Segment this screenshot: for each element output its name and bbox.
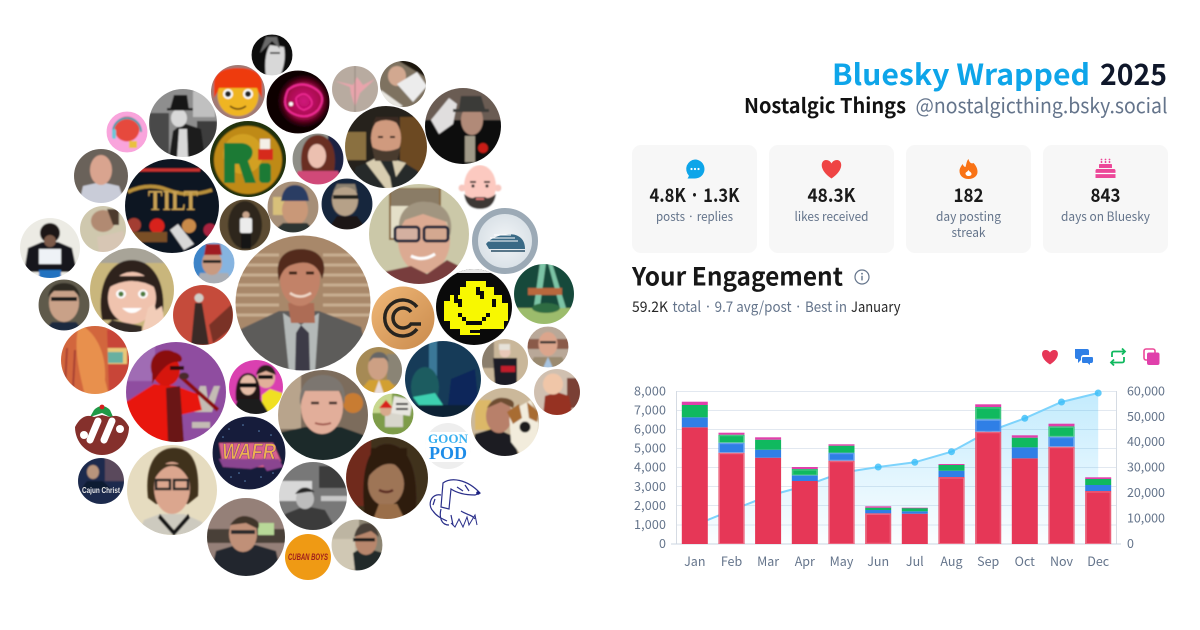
left axis labels: 3,000 [634, 476, 666, 495]
month labels [684, 551, 1110, 570]
avatar: man in woolly hat [267, 181, 319, 233]
card: likes received [769, 145, 894, 253]
avatar: top hat parade [148, 88, 218, 158]
avatar: red singer [125, 341, 227, 443]
icon: reposts [1111, 348, 1125, 366]
avatar: Cuban Boys orange [284, 533, 332, 581]
avatar: old man in glasses [321, 178, 373, 230]
avatar: teal aquarium scene [404, 340, 482, 418]
avatar: big man in grey suit [234, 234, 372, 372]
avatar: scary man in hat [424, 87, 502, 165]
avatar: woman with red hair [292, 133, 344, 185]
card: posts and replies [632, 145, 757, 253]
bars [682, 402, 1111, 544]
right axis labels: 40,000 [1127, 431, 1165, 450]
avatar: smiling man in blazer [527, 326, 569, 368]
card: posts and replies: posts · replies [656, 206, 733, 225]
avatar: woman with dark hair [345, 436, 429, 520]
right axis labels [1127, 380, 1165, 552]
avatar: bearded man [344, 105, 428, 189]
cumulative area [695, 393, 1098, 544]
icon: cake [1096, 159, 1116, 178]
card: likes received: 48.3K [808, 181, 856, 208]
title: 2025 [1100, 52, 1167, 94]
left axis labels: 4,000 [634, 456, 666, 476]
avatar: lego head [210, 64, 266, 120]
avatar: memoji [89, 247, 175, 333]
avatar: green fairground [513, 263, 575, 325]
avatar: red figure poster [172, 284, 234, 346]
right axis labels: 10,000 [1127, 508, 1165, 526]
cumulative line [691, 390, 1102, 529]
icon: quotes [1144, 349, 1160, 365]
month labels: Feb [721, 551, 742, 570]
month labels: Dec [1087, 551, 1110, 570]
avatar cluster [19, 34, 581, 581]
right axis labels: 20,000 [1127, 482, 1165, 501]
avatar: man with shaggy hair and glasses [125, 443, 219, 537]
left axis labels: 0 [659, 533, 666, 552]
month labels: Oct [1015, 551, 1035, 570]
avatar: bald cartoon [458, 165, 502, 210]
card: likes received: likes received [794, 206, 868, 225]
avatar: Cajun Christmas poster [77, 457, 125, 505]
engagement summary: total · 9.7 avg/post · Best in [672, 296, 847, 317]
avatar: small man in gold jacket [355, 346, 403, 394]
title: Bluesky Wrapped [832, 52, 1090, 94]
grid lines [671, 391, 1121, 544]
left axis labels: 7,000 [634, 400, 666, 418]
avatar: man with glasses at desk [331, 519, 383, 571]
month labels: Aug [940, 551, 963, 570]
icon: likes [1042, 350, 1058, 364]
avatar: blue ink rat [430, 480, 480, 527]
avatar: copper C logo [371, 286, 435, 350]
month labels: Nov [1050, 551, 1074, 570]
left axis labels: 1,000 [634, 514, 666, 533]
avatar: man in white shirt [379, 60, 427, 108]
avatar: Cajun Christmas poster: Cajun Christ [82, 486, 120, 495]
avatar: man profile [79, 205, 127, 253]
month labels: Jun [867, 551, 889, 570]
icon: heart [822, 160, 841, 178]
engagement summary: 59.2K [632, 296, 669, 317]
stats cards [632, 145, 1168, 253]
card: days on Bluesky: 843 [1090, 181, 1120, 208]
engagement summary: January [851, 296, 901, 317]
icon: replies [1075, 349, 1093, 365]
avatar: Goon Pod logo: POD [429, 443, 467, 463]
right axis labels: 60,000 [1127, 380, 1165, 400]
avatar: man in fez [193, 242, 235, 284]
avatar: pink knitting [106, 111, 148, 153]
month labels: Sep [977, 551, 1000, 570]
card: posts and replies: 4.8K · 1.3K [650, 181, 740, 208]
avatar: man in office [206, 497, 286, 577]
avatar: Goon Pod logo [428, 423, 468, 469]
left axis labels: 5,000 [634, 438, 666, 456]
icon: flame [960, 159, 978, 179]
month labels: Jul [906, 551, 924, 570]
avatar: orange library [59, 324, 131, 396]
avatar: child in striped shirt [533, 368, 581, 416]
card: days on Bluesky: days on Bluesky [1061, 206, 1150, 225]
avatar: santa with sign [372, 393, 414, 435]
avatar: black and white room [278, 461, 349, 531]
avatar: judge in robe [481, 338, 529, 386]
icon: info [855, 270, 869, 284]
avatar: Goon Pod logo: GOON [428, 431, 469, 446]
avatar: man with dog [470, 387, 540, 457]
stacked bar and line chart [634, 380, 1165, 570]
left axis labels: 2,000 [634, 495, 666, 514]
left axis labels: 6,000 [634, 418, 666, 438]
card: day posting streak: 182 [954, 181, 984, 208]
profile name and handle [744, 89, 1168, 119]
heading: your engagement: Your Engagement [631, 258, 843, 294]
card: days on Bluesky [1043, 145, 1168, 253]
card: day posting streak: streak [952, 222, 986, 241]
right axis labels: 50,000 [1127, 406, 1165, 425]
month labels: May [830, 551, 854, 570]
profile name and handle: Nostalgic Things [744, 89, 906, 119]
chart legend icons [1042, 348, 1160, 366]
avatar: man with sign [19, 217, 81, 279]
avatar: man with glasses, big portrait [368, 183, 470, 285]
avatar: art deco train [475, 211, 535, 271]
avatar: couple in sunglasses [228, 359, 284, 415]
icon: chat bubble [686, 160, 704, 178]
avatar: christmas pudding logo [75, 405, 129, 455]
avatar: TILT: TILT [148, 185, 198, 217]
avatar: man in archway [219, 199, 271, 251]
avatar: Cuban Boys orange: CUBAN BOYS [288, 552, 328, 562]
left axis labels [634, 380, 666, 552]
avatar: pink figure sketch [331, 65, 379, 113]
avatar: WAFR starfield: WAFR [222, 439, 276, 464]
left axis labels: 8,000 [634, 380, 666, 400]
profile name and handle: @nostalgicthing.bsky.social [916, 89, 1168, 119]
month labels: Jan [684, 551, 705, 570]
card: day posting streak [906, 145, 1031, 253]
right axis labels: 30,000 [1127, 456, 1165, 476]
avatar: black and white face [251, 34, 293, 76]
month labels: Mar [757, 551, 779, 570]
card: day posting streak: day posting [936, 206, 1001, 225]
avatar: bald man [73, 148, 129, 204]
avatar: young man with glasses [38, 279, 90, 331]
right axis labels: 0 [1127, 533, 1134, 552]
avatar: TILT [124, 158, 220, 254]
avatar: grey haired man in dark jumper [277, 369, 369, 461]
avatar: yellow pixel face [435, 268, 513, 346]
month labels: Apr [795, 551, 815, 570]
avatar: pink neon [266, 70, 331, 134]
avatar: WAFR starfield [212, 416, 286, 490]
avatar: christmas ornament Ri [209, 120, 287, 198]
